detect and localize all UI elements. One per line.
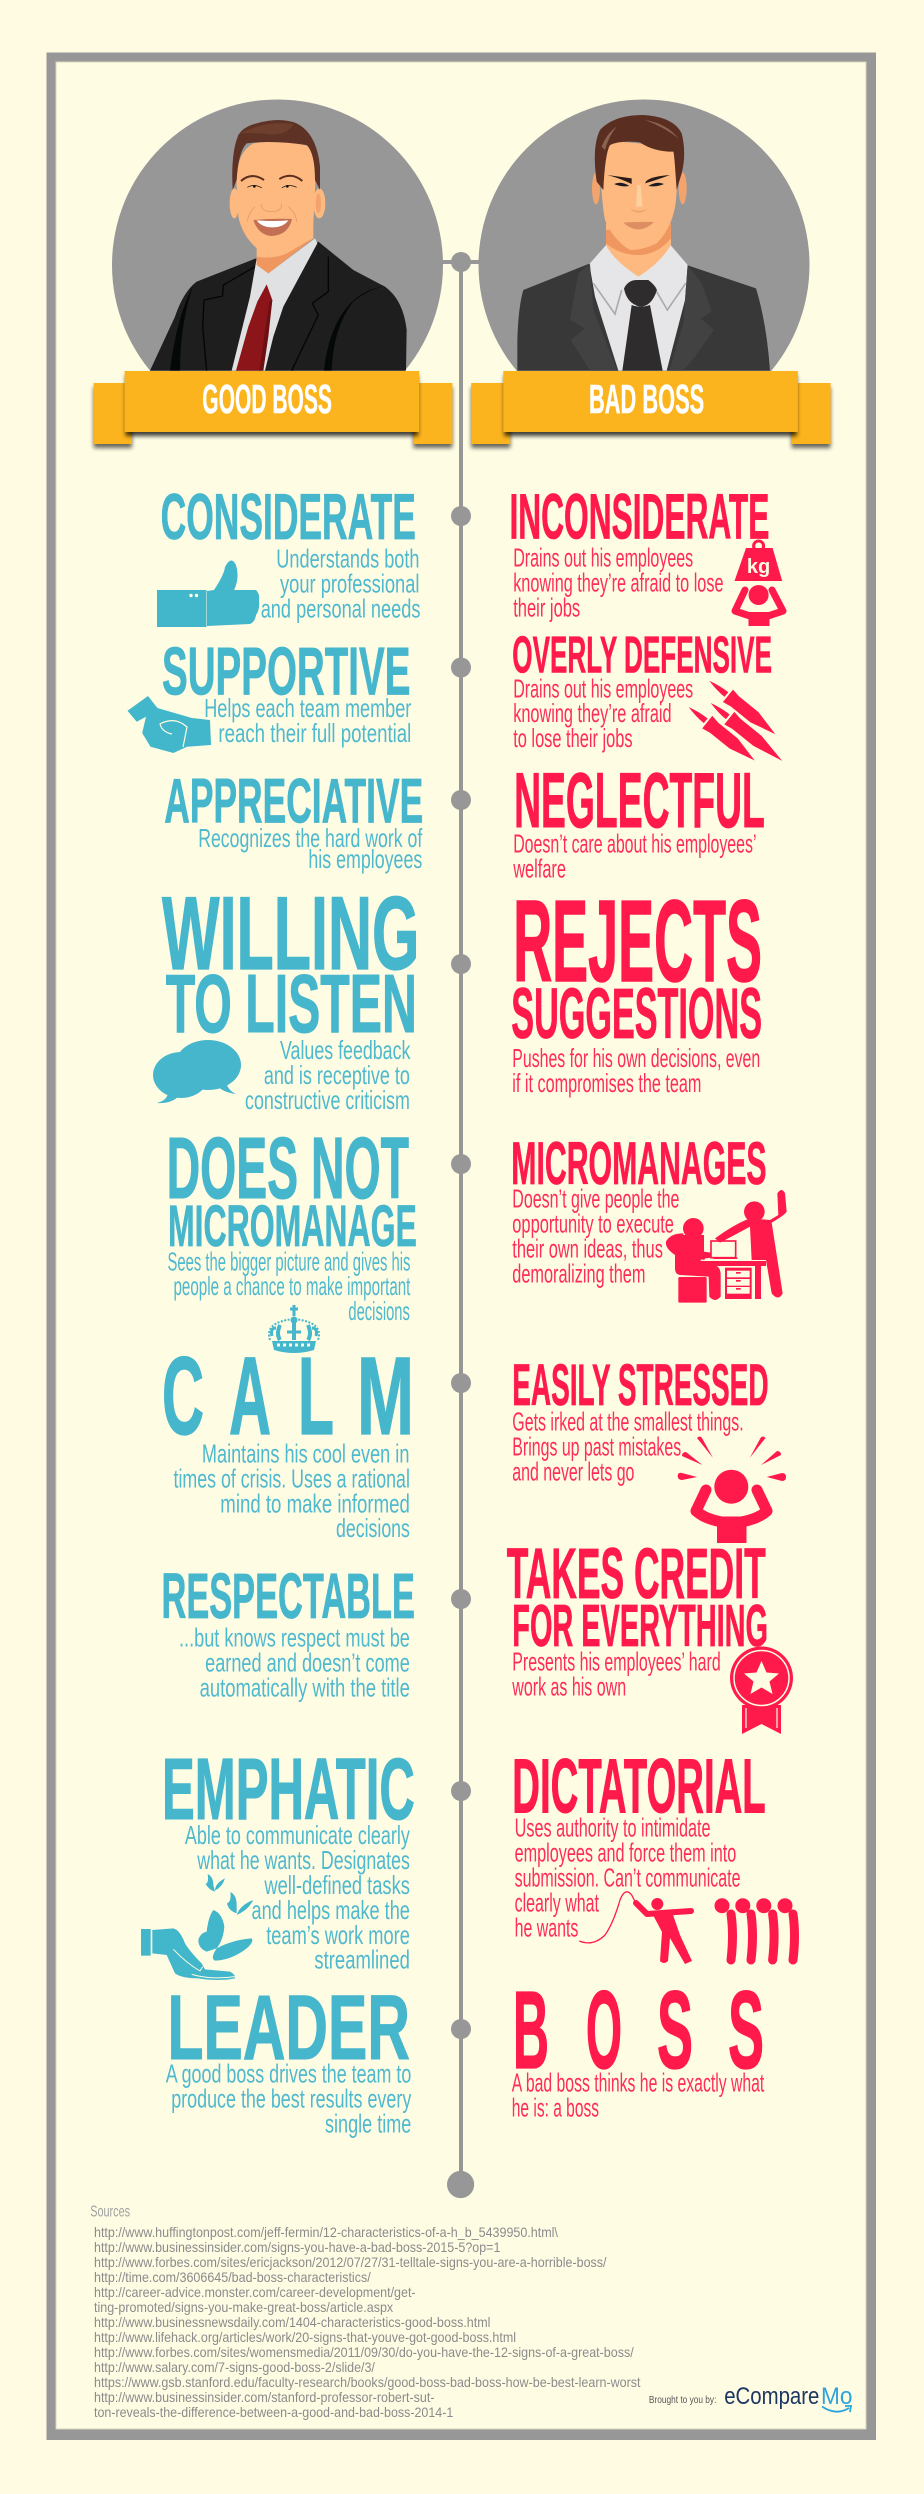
text: willing to listen description <box>245 1035 411 1115</box>
text: overly defensive description: Drains out his employees <box>513 674 693 704</box>
text: inconsiderate description: knowing they’re afraid to lose <box>513 568 724 598</box>
text: calm description: Maintains his cool even in <box>202 1439 409 1469</box>
sources <box>90 2204 641 2420</box>
text: takes credit description <box>512 1647 721 1702</box>
panel: leader <box>166 1977 411 2139</box>
heading: emphatic: EMPHATIC <box>162 1741 415 1838</box>
heading: willing to listen <box>162 876 420 1050</box>
icon: crown <box>269 1305 319 1353</box>
icon: award ribbon <box>730 1646 793 1734</box>
sources heading: Sources <box>90 2204 130 2221</box>
text: respectable description: ...but knows respect must be <box>179 1623 410 1653</box>
text: micromanages description: opportunity to execute <box>512 1209 674 1239</box>
icon: stressed person <box>678 1436 786 1543</box>
heading: good boss: GOOD BOSS <box>202 376 332 422</box>
sources list <box>94 2224 641 2420</box>
heading: calm: L <box>298 1335 334 1458</box>
text: emphatic description: what he wants. Designates <box>197 1845 410 1875</box>
panel: considerate <box>157 480 420 627</box>
text: appreciative description <box>198 823 423 874</box>
heading: boss: S <box>657 1969 693 2092</box>
heading: bad boss: BAD BOSS <box>589 376 704 422</box>
sources list: http://www.huffingtonpost.com/jeff-fermin/12-characteristics-of-a-h_b_5439950.html\ <box>94 2224 558 2240</box>
text: micromanages description: demoralizing them <box>512 1259 645 1289</box>
sources list: ton-reveals-the-difference-between-a-good-and-bad-boss-2014-1 <box>94 2404 453 2420</box>
sources list: http://www.businessinsider.com/signs-you-have-a-bad-boss-2015-5?op=1 <box>94 2239 501 2255</box>
heading: does not micromanage <box>167 1120 417 1259</box>
text: respectable description: earned and doesn’t come <box>205 1648 410 1678</box>
icon: person under weight <box>734 541 783 626</box>
credit: brought to you by eCompareMo <box>649 2383 852 2412</box>
panel: neglectful <box>513 756 765 884</box>
panel: respectable <box>162 1560 415 1703</box>
heading: calm: A <box>229 1335 271 1458</box>
text: emphatic description: well-defined tasks <box>264 1870 410 1900</box>
text: willing to listen description: and is receptive to <box>264 1060 410 1090</box>
text: inconsiderate description <box>513 543 724 623</box>
text: neglectful description: welfare <box>513 854 566 884</box>
text: dictatorial description: employees and force them into <box>515 1838 736 1868</box>
text: considerate description <box>261 544 420 624</box>
icon: thumbs up <box>157 560 259 627</box>
text: dictatorial description: Uses authority to intimidate <box>515 1813 711 1843</box>
text: does not micromanage description: people a chance to make important <box>174 1271 411 1301</box>
text: easily stressed description: Gets irked at the smallest things. <box>512 1407 744 1437</box>
text: respectable description <box>179 1623 410 1703</box>
text: dictatorial description: submission. Can’t communicate <box>515 1863 740 1893</box>
icon: whip and line of people <box>579 1892 794 1964</box>
text: supportive description <box>204 693 412 748</box>
sources list: http://www.forbes.com/sites/ericjackson/2012/07/27/31-telltale-signs-you-are-a-horrible-boss/ <box>94 2254 607 2270</box>
text: calm description: mind to make informed <box>220 1489 410 1519</box>
sources list: http://www.forbes.com/sites/womensmedia/2011/09/30/do-you-have-the-12-signs-of-a-great-boss/ <box>94 2344 634 2360</box>
credit: brought to you by eCompareMo: Brought to you by: <box>649 2395 716 2406</box>
panel: calm <box>162 1335 414 1543</box>
sources list: http://career-advice.monster.com/career-development/get- <box>94 2284 416 2300</box>
text: rejects suggestions description: Pushes for his own decisions, even <box>512 1043 760 1073</box>
text: does not micromanage description: decisions <box>348 1296 410 1326</box>
heading: supportive: SUPPORTIVE <box>162 634 410 710</box>
text: boss description: he is: a boss <box>512 2093 599 2123</box>
sources list: ting-promoted/signs-you-make-great-boss/article.aspx <box>94 2299 393 2315</box>
icon: speech bubbles <box>153 1040 241 1103</box>
panel: rejects suggestions <box>511 876 762 1098</box>
text: emphatic description <box>185 1820 410 1975</box>
sources list: http://www.businessinsider.com/stanford-professor-robert-sut- <box>94 2389 435 2405</box>
icon: person under weight: kg <box>747 556 770 578</box>
text: supportive description: Helps each team member <box>204 693 412 723</box>
panel: easily stressed <box>512 1353 786 1543</box>
text: emphatic description: and helps make the <box>252 1895 410 1925</box>
text: appreciative description: Recognizes the hard work of <box>198 823 423 853</box>
heading: calm <box>162 1335 414 1458</box>
text: boss description: A bad boss thinks he is exactly what <box>512 2068 765 2098</box>
icon: rockets <box>684 674 787 767</box>
banner: bad boss <box>471 371 831 448</box>
portrait: good boss <box>112 100 443 430</box>
text: leader description: produce the best results every <box>171 2084 411 2114</box>
text: does not micromanage description <box>168 1247 411 1326</box>
panel: boss: S <box>728 1969 764 2092</box>
text: easily stressed description <box>512 1407 744 1487</box>
heading: boss: B <box>513 1969 549 2092</box>
heading: calm: C <box>162 1335 204 1458</box>
heading: does not micromanage: DOES NOT <box>167 1120 409 1217</box>
timeline spine <box>440 252 482 2198</box>
panel: supportive <box>128 634 412 753</box>
text: calm description: decisions <box>336 1513 410 1543</box>
heading: considerate: CONSIDERATE <box>161 480 416 553</box>
text: takes credit description: work as his own <box>512 1672 626 1702</box>
text: overly defensive description: to lose their jobs <box>513 723 633 753</box>
text: considerate description: and personal needs <box>261 594 420 624</box>
heading: respectable: RESPECTABLE <box>162 1560 415 1632</box>
text: easily stressed description: and never lets go <box>512 1457 634 1487</box>
logo: eCompareMo: Mo <box>821 2383 852 2410</box>
sources list: http://www.businessnewsdaily.com/1404-characteristics-good-boss.html <box>94 2314 490 2330</box>
banner: good boss <box>94 371 452 448</box>
panel: dictatorial <box>512 1744 794 1964</box>
heading: does not micromanage: MICROMANAGE <box>168 1194 417 1259</box>
icon: handshake <box>128 696 211 753</box>
icon: boss over employee at desk <box>666 1190 787 1303</box>
text: leader description: A good boss drives the team to <box>166 2059 411 2089</box>
text: overly defensive description <box>513 674 693 753</box>
text: rejects suggestions description: if it compromises the team <box>512 1068 701 1098</box>
text: rejects suggestions description <box>512 1043 760 1098</box>
text: leader description <box>166 2059 411 2139</box>
text: neglectful description: Doesn’t care about his employees’ <box>513 829 756 859</box>
panel: boss <box>512 1969 765 2123</box>
panel: micromanages <box>511 1130 787 1303</box>
portrait: bad boss <box>478 100 810 430</box>
text: considerate description: your professional <box>280 569 420 599</box>
text: respectable description: automatically with the title <box>200 1673 410 1703</box>
text: dictatorial description <box>515 1813 740 1943</box>
panel: inconsiderate <box>510 480 783 626</box>
heading: rejects suggestions <box>511 876 762 1054</box>
heading: boss <box>513 1969 764 2092</box>
text: dictatorial description: he wants <box>515 1913 578 1943</box>
text: leader description: single time <box>325 2109 411 2139</box>
heading: willing to listen: WILLING <box>162 876 420 992</box>
heading: boss: O <box>586 1969 622 2092</box>
panel: willing to listen <box>153 876 420 1115</box>
text: takes credit description: Presents his employees’ hard <box>512 1647 721 1677</box>
text: willing to listen description: Values feedback <box>280 1035 411 1065</box>
sources list: http://www.salary.com/7-signs-good-boss-2/slide/3/ <box>94 2359 375 2375</box>
text: boss description <box>512 2068 765 2123</box>
heading: calm: M <box>357 1335 414 1458</box>
text: willing to listen description: constructive criticism <box>245 1085 410 1115</box>
text: easily stressed description: Brings up past mistakes <box>512 1432 681 1462</box>
text: neglectful description <box>513 829 756 884</box>
text: micromanages description: Doesn’t give people the <box>512 1184 679 1214</box>
icon: hand with butterflies <box>141 1874 253 1980</box>
text: emphatic description: team’s work more <box>266 1920 410 1950</box>
panel: emphatic <box>141 1741 415 1980</box>
text: emphatic description: streamlined <box>314 1945 410 1975</box>
panel: appreciative <box>164 767 423 874</box>
sources list: https://www.gsb.stanford.edu/faculty-research/books/good-boss-bad-boss-how-be-best-learn-worst <box>94 2374 641 2390</box>
panel: overly defensive <box>512 626 787 767</box>
text: inconsiderate description: Drains out his employees <box>513 543 693 573</box>
sources list: http://www.lifehack.org/articles/work/20-signs-that-youve-got-good-boss.html <box>94 2329 516 2345</box>
text: calm description: times of crisis. Uses a rational <box>174 1464 410 1494</box>
panel: takes credit for everything <box>507 1535 793 1734</box>
logo: eCompareMo: eCompare <box>724 2383 819 2410</box>
text: supportive description: reach their full potential <box>218 718 411 748</box>
heading: willing to listen: TO LISTEN <box>166 957 417 1050</box>
text: overly defensive description: knowing they’re afraid <box>513 698 672 728</box>
text: inconsiderate description: their jobs <box>513 593 580 623</box>
text: does not micromanage description: Sees the bigger picture and gives his <box>168 1247 410 1277</box>
text: emphatic description: Able to communicate clearly <box>185 1820 410 1850</box>
text: considerate description: Understands both <box>276 544 420 574</box>
heading: takes credit for everything <box>507 1535 768 1659</box>
panel: does not micromanage <box>167 1120 417 1353</box>
heading: leader: LEADER <box>168 1977 410 2079</box>
text: micromanages description <box>512 1184 679 1289</box>
text: dictatorial description: clearly what <box>515 1888 599 1918</box>
sources list: http://time.com/3606645/bad-boss-characteristics/ <box>94 2269 371 2285</box>
text: appreciative description: his employees <box>308 844 422 874</box>
text: calm description <box>174 1439 410 1543</box>
heading: appreciative: APPRECIATIVE <box>164 767 423 837</box>
text: micromanages description: their own ideas, thus <box>512 1234 663 1264</box>
